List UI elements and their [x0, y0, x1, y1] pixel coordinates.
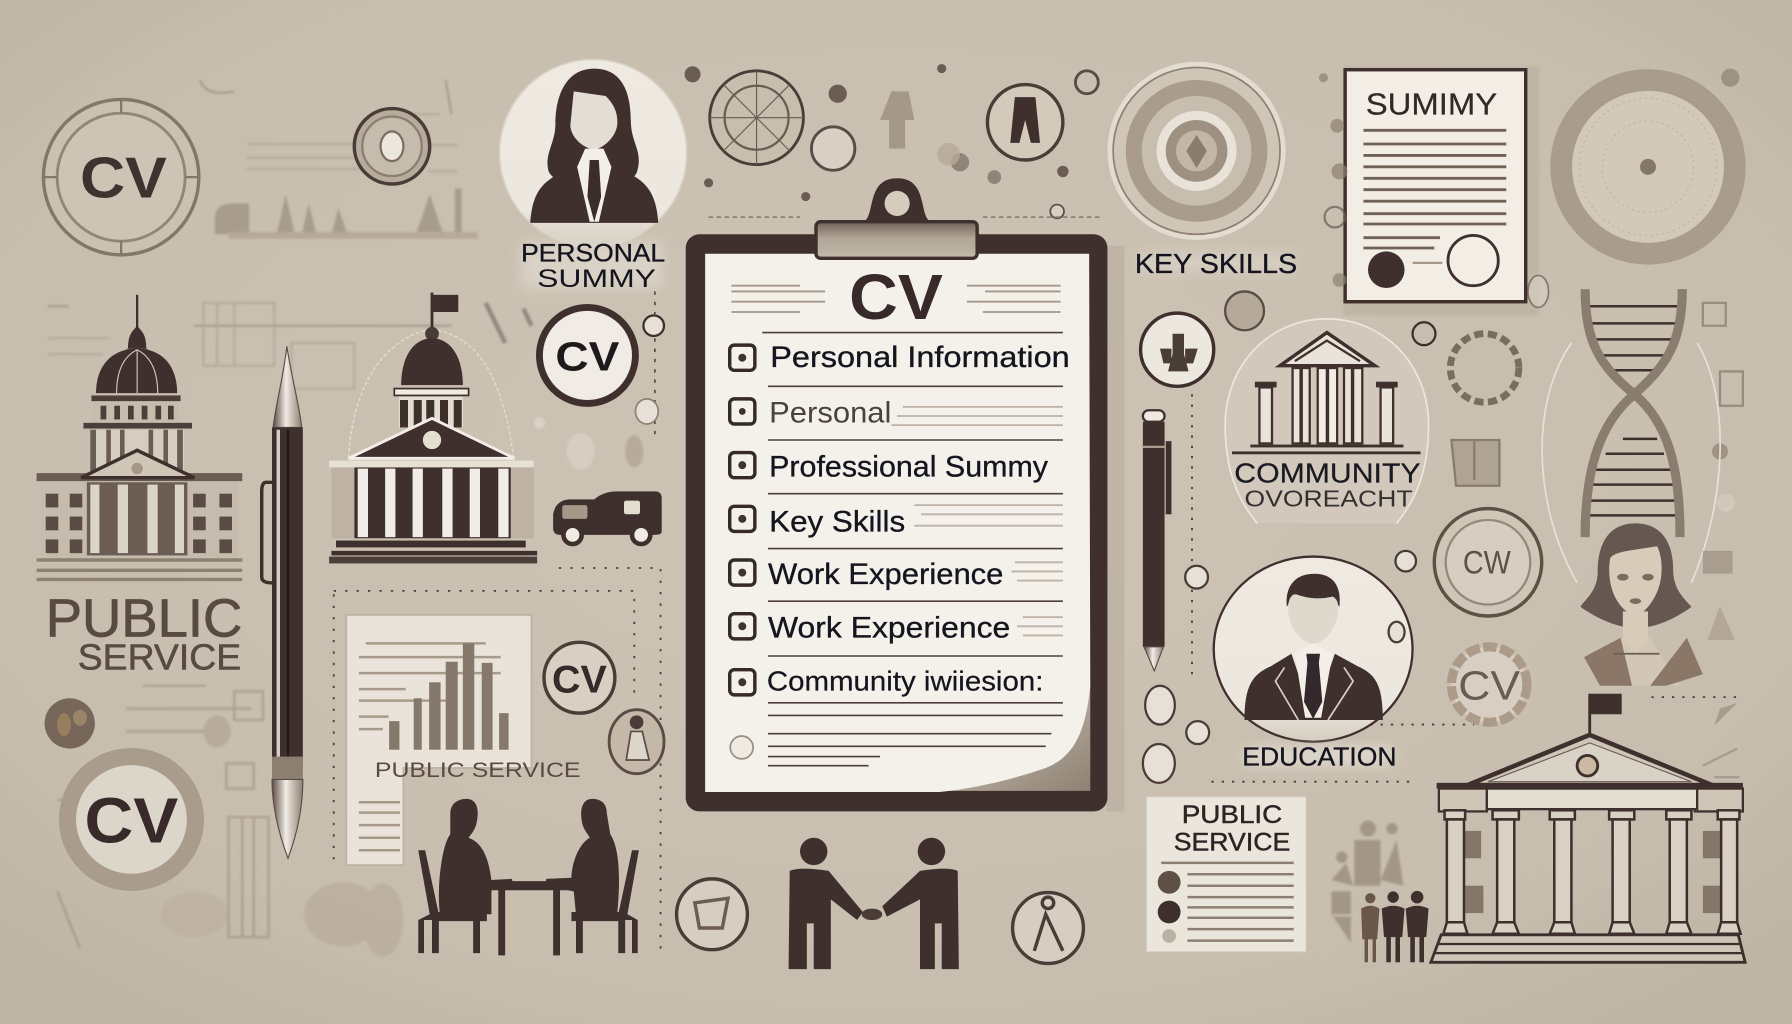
icon: three standing people [1361, 891, 1429, 962]
top centre icons [685, 64, 1103, 218]
icon: right pen [1143, 410, 1171, 671]
flag [431, 293, 433, 331]
label: Public Service left: PUBLIC [46, 589, 242, 649]
icon: big temple [1431, 694, 1745, 962]
hair [1287, 574, 1340, 607]
label: Personal Summy [521, 240, 665, 293]
pen barrel [272, 427, 303, 766]
bullets [1158, 871, 1181, 894]
icon: central capitol [329, 293, 537, 563]
blazer [530, 167, 658, 223]
seal dot [1368, 251, 1405, 288]
label: Personal Summy: SUMMY [537, 265, 656, 293]
bar chart [389, 643, 509, 750]
shirt [577, 149, 611, 222]
report lines [359, 643, 501, 850]
icon: DNA helix [1542, 289, 1720, 583]
icon: compass target [710, 71, 803, 165]
dashed halo [349, 329, 520, 537]
lapels [1275, 667, 1353, 720]
portrait: man [1214, 557, 1413, 742]
badge: CV stamp [1451, 647, 1527, 722]
row: Professional Summy: Professional Summy [769, 451, 1048, 484]
badge: report CV: CV [552, 659, 607, 702]
panel: central clipboard [686, 178, 1125, 811]
dome [425, 327, 439, 341]
blazer [1584, 638, 1703, 686]
icon: big disc [1561, 80, 1735, 254]
label: Public Service left [46, 589, 242, 678]
left figure [800, 838, 827, 865]
right figure [918, 838, 945, 865]
icon: small medallion [354, 109, 430, 184]
row: Personal: Personal [769, 396, 891, 429]
faded skyline and lines top left [48, 80, 478, 389]
icon: concentric target [1107, 62, 1286, 240]
face [570, 91, 617, 150]
clipboard board [686, 234, 1107, 811]
paper sheet [705, 254, 1090, 792]
panel: Public Service document: PUBLIC [1182, 801, 1282, 829]
clipboard shadow [1106, 246, 1125, 811]
icon: left pen [262, 346, 303, 858]
pen ferrule [272, 757, 303, 779]
small right-side icons [1319, 69, 1743, 512]
badge: small CV: CV [555, 333, 620, 379]
left person [439, 799, 513, 914]
seal ring [1448, 235, 1498, 286]
hall [354, 467, 511, 538]
dome [136, 295, 138, 331]
eyes and lips [1617, 574, 1654, 604]
neck [1623, 611, 1648, 654]
small icons beside key badge [1225, 291, 1519, 486]
label: Key Skills: KEY SKILLS [1135, 248, 1297, 279]
tie [1304, 654, 1322, 719]
icon: white key badge [1141, 313, 1214, 386]
windows [46, 494, 232, 553]
small dots [685, 64, 1098, 218]
chart label: PUBLIC SERVICE [375, 757, 581, 782]
pediment [1467, 735, 1712, 785]
faded crowd [1331, 821, 1403, 943]
badge: CV ring top left [43, 99, 199, 255]
panel: Community Outreach: OVOREACHT [1245, 485, 1413, 511]
small pin icons by man [1143, 551, 1416, 783]
footer seal [730, 736, 753, 759]
badge: large CV ring: CV [85, 784, 179, 856]
heading rules [731, 286, 1061, 312]
panel: Public Service document [1146, 797, 1306, 952]
paper [346, 615, 531, 865]
icon: round stamp left [677, 879, 747, 950]
handshake [862, 909, 882, 920]
label: COMMUNITY [1234, 457, 1421, 488]
pen tip top [273, 346, 302, 427]
badge: small CV [539, 291, 664, 434]
portrait: woman sketch [1581, 523, 1703, 686]
strands [1585, 289, 1680, 537]
badge: CV ring top left: CV [80, 147, 167, 211]
portrait: woman [499, 59, 687, 247]
faded bottom-left blots [160, 882, 403, 957]
face [1288, 594, 1338, 643]
entablature [1437, 783, 1743, 789]
table [487, 881, 570, 955]
faded cluster by capitol [486, 303, 643, 470]
temple [1232, 333, 1421, 454]
flag [1588, 694, 1591, 734]
heading: CV: CV [849, 261, 943, 333]
row: Community: Community iwiiesion: [767, 665, 1043, 696]
stippled shadow [1343, 66, 1539, 315]
drum [91, 395, 181, 401]
icon: round key [987, 85, 1063, 160]
text lines [1363, 130, 1506, 248]
columns [1443, 810, 1741, 934]
left chair [418, 850, 439, 953]
drum [399, 397, 463, 427]
panel: Community Outreach [1225, 319, 1429, 523]
dotted rule [709, 216, 1103, 218]
badge: CW: CW [1463, 545, 1512, 581]
icon: small dial [811, 127, 855, 170]
right person [545, 799, 619, 914]
icon: left capitol [37, 295, 242, 579]
panel: Summy document [1343, 66, 1539, 315]
row: Work Experience 1: Work Experience [768, 558, 1003, 591]
flanking arcs [1542, 343, 1720, 583]
icon: handshake figures [789, 838, 959, 969]
icon: brown coin [45, 698, 95, 749]
row rules [762, 333, 1063, 766]
list lines [1161, 863, 1294, 941]
dashed connectors right [1192, 394, 1743, 782]
tie [587, 160, 601, 222]
pen nib [272, 779, 303, 858]
icon: two people at table [418, 799, 639, 955]
chest [1600, 638, 1680, 686]
panel: Summy document: SUMIMY [1366, 86, 1497, 121]
pen clip [262, 482, 272, 583]
portico [87, 482, 187, 555]
clip [816, 178, 977, 258]
badge: CV stamp: CV [1458, 662, 1521, 708]
badge: CW [1434, 509, 1542, 616]
dashed connector frame [334, 568, 661, 957]
faded icons right edge [1703, 551, 1739, 777]
hair [547, 69, 639, 182]
right chair [618, 850, 639, 953]
row filler lines [891, 407, 1063, 635]
panel: report with bar chart [346, 615, 581, 865]
rungs [1587, 306, 1680, 515]
jacket [1245, 654, 1383, 720]
steps [336, 541, 526, 547]
steps [37, 560, 242, 579]
row: Key Skills: Key Skills [769, 505, 905, 538]
row: Personal Information: Personal Information [770, 341, 1070, 374]
badge: report CV [544, 642, 615, 713]
label: Education: EDUCATION [1242, 742, 1397, 772]
hair [1581, 523, 1691, 627]
label: Personal Summy: PERSONAL [521, 240, 665, 268]
wings and pediment [37, 473, 242, 481]
icon: van [553, 491, 662, 544]
windows [1463, 831, 1721, 913]
icon: lamp [880, 91, 914, 149]
panel: Public Service document: SERVICE [1174, 828, 1290, 856]
row: Work Experience 2: Work Experience [768, 612, 1010, 645]
shirt [1295, 643, 1333, 718]
pediment [349, 418, 514, 458]
badge: large CV ring [67, 757, 195, 882]
halo [1225, 319, 1429, 523]
faded icons beside coin [57, 686, 269, 949]
label: Public Service left: SERVICE [78, 637, 241, 678]
face [1609, 546, 1662, 615]
icon: bell medallion [609, 710, 664, 774]
icon: round stamp right [1013, 893, 1083, 963]
steps [1431, 935, 1745, 962]
paper curl shadow [933, 686, 1090, 791]
upper colonnade [90, 430, 184, 478]
